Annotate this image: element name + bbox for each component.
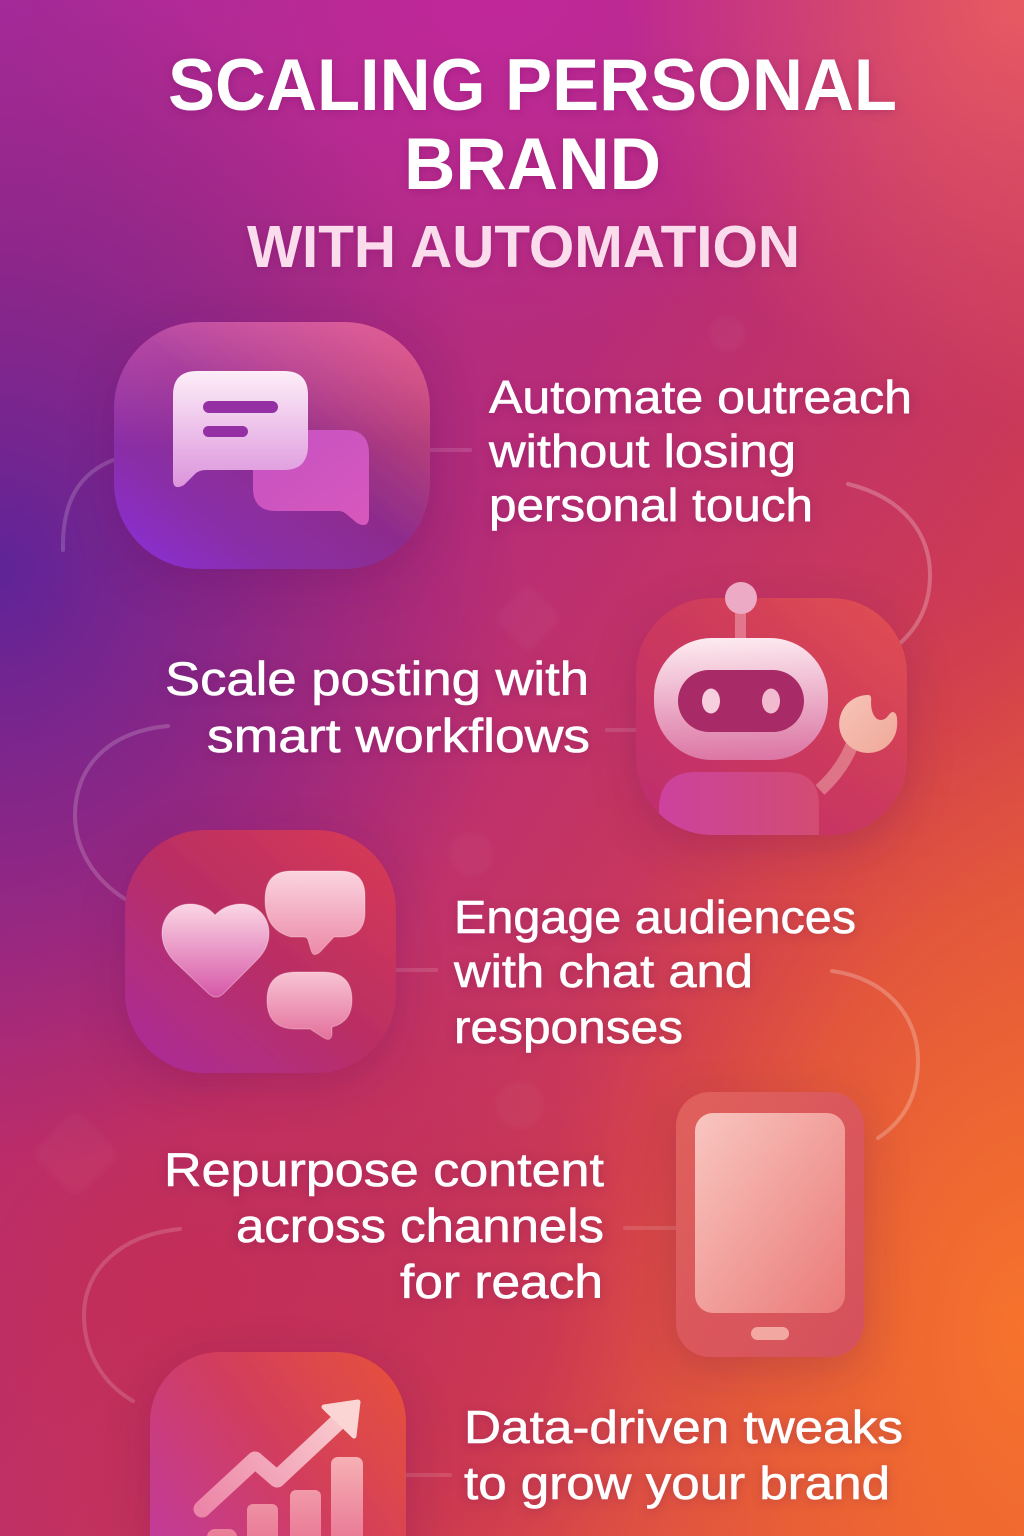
icon: heart [162,904,269,997]
text: repurpose content: Repurpose content [164,1143,604,1196]
title [168,45,897,280]
text: automate outreach: personal touch [489,479,813,531]
icon: front bubble [173,371,308,487]
step 2: scale posting [165,582,907,835]
icon: robot tile [636,582,907,835]
icon: tablet home button [751,1327,789,1340]
icon: robot body [659,772,819,835]
text: engage audiences: with chat and [453,945,753,997]
subtitle: WITH AUTOMATION [247,214,800,280]
text: engage audiences: Engage audiences [454,891,856,943]
icon: large speech bubble [265,871,365,955]
text: repurpose content: across channels [236,1199,604,1252]
title line 1: SCALING PERSONAL [168,45,897,126]
icon: wrench head [839,695,897,753]
step 1: automate outreach [114,322,925,569]
icon: robot head [654,638,828,760]
text: data-driven tweaks: Data-driven tweaks [464,1401,903,1453]
text: automate outreach: Automate outreach [489,371,912,423]
icon: chat bubbles tile [114,322,430,569]
icon: antenna [735,612,746,640]
title line 2: BRAND [404,124,661,205]
text: repurpose content: for reach [400,1255,603,1308]
text: scale posting: Scale posting with [165,652,589,705]
icon: heart and chat tile [125,830,396,1073]
icon: trend arrow [202,1420,340,1509]
step 5: data-driven tweaks [150,1352,916,1536]
step 4: repurpose content [164,1092,864,1357]
icon: bars [207,1457,363,1536]
text: data-driven tweaks: to grow your brand [464,1457,890,1509]
step 3: engage audiences [125,830,869,1073]
icon: small speech bubble [267,972,352,1039]
icon: growth chart tile [150,1352,406,1536]
icon: robot arm [820,745,852,790]
connector curves [63,450,930,1475]
icon: tablet screen [695,1113,845,1313]
text: engage audiences: responses [454,1001,683,1053]
text: scale posting: smart workflows [207,709,590,762]
text: automate outreach: without losing [488,425,796,477]
icon: tablet [676,1092,864,1357]
icon: back bubble [253,430,369,525]
